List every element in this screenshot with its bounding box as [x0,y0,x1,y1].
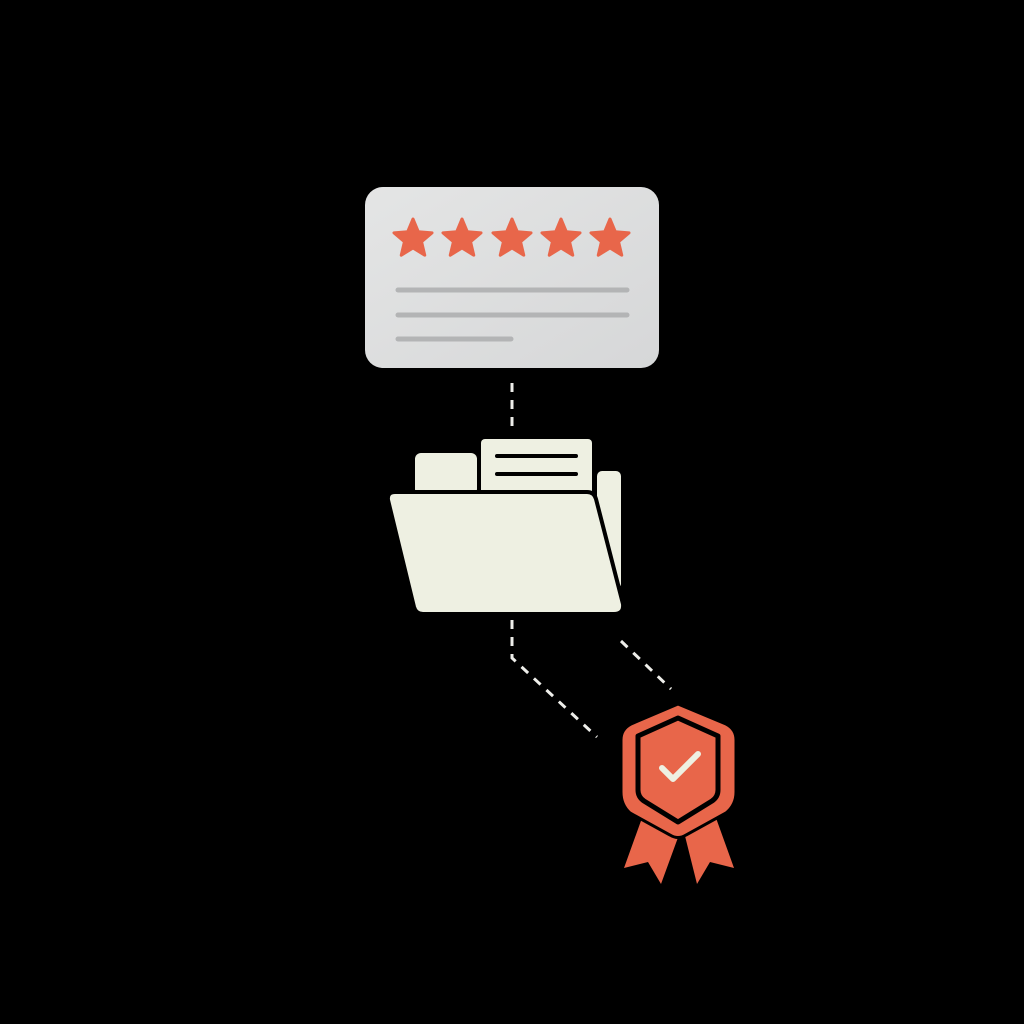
review card [365,187,659,368]
connectors: folder to badge [512,620,671,737]
icon: certified badge [621,704,736,884]
star rating [394,219,629,255]
review text lines [398,290,627,339]
icon: folder [388,439,623,614]
ribbons [624,818,734,884]
connector: card to folder [510,383,514,432]
check mark [662,754,698,779]
document [481,439,592,495]
